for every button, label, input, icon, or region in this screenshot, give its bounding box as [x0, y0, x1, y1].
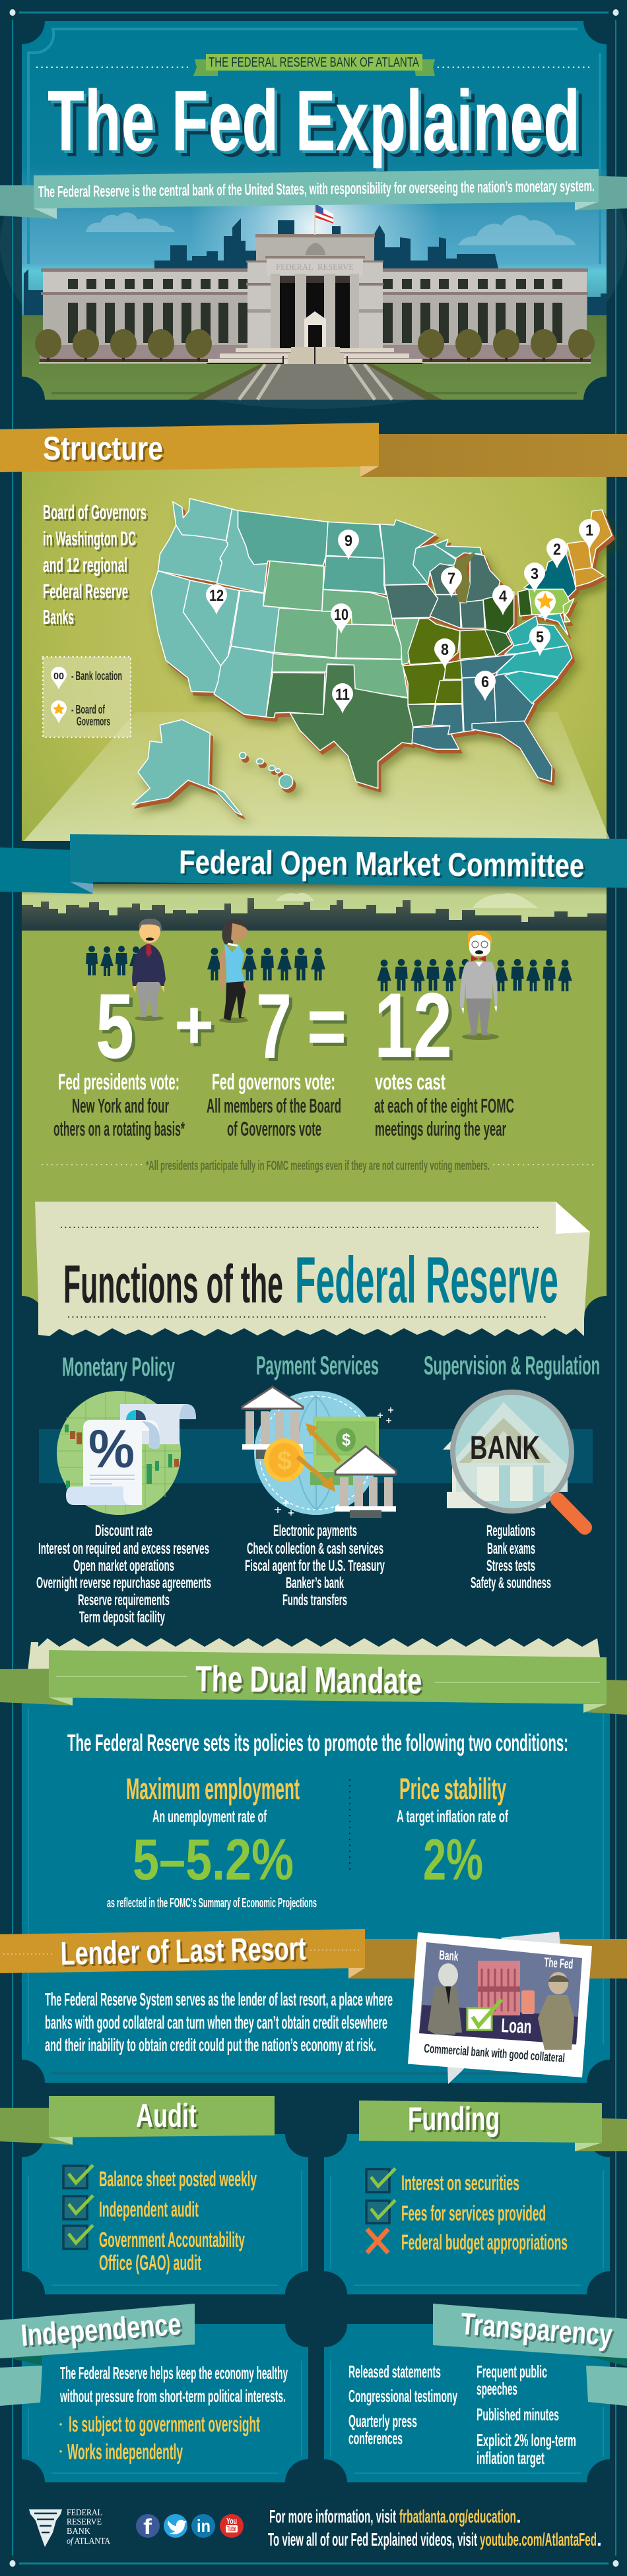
- heading: Functions of the: [63, 1254, 283, 1314]
- pin 5: [529, 626, 550, 656]
- list: Open market operations: [73, 1557, 174, 1575]
- pin 1: 1: [585, 522, 593, 539]
- crowd: governors: [207, 948, 325, 980]
- structure description: Banks: [43, 605, 74, 629]
- legend: - Board of: [71, 703, 106, 716]
- column: Maximum employment: as reflected in the FOMC’s Summary of Economic Projections: [107, 1896, 317, 1911]
- ribbon: Structure: [0, 423, 627, 477]
- column: Price stability: Price stability: [399, 1772, 506, 1806]
- loan door: [478, 1961, 520, 2015]
- column: Payment Services: [242, 1351, 396, 1609]
- district 10: [263, 561, 420, 698]
- transparency list: Published minutes: [477, 2405, 559, 2424]
- footer text: For more information, visit: [269, 2506, 396, 2527]
- ribbon: The Dual Mandate: [0, 1650, 627, 1715]
- ribbon: The Dual Mandate: The Dual Mandate: [195, 1658, 422, 1702]
- flag: [314, 203, 333, 235]
- panel: functions: [36, 1351, 600, 1626]
- text: Fed presidents vote: New York and four: [72, 1094, 169, 1117]
- district 2: [524, 553, 576, 598]
- legend: - Bank location: [71, 669, 122, 683]
- list: Electronic payments: [273, 1522, 357, 1540]
- column: Supervision & Regulation: [424, 1351, 600, 1592]
- clouds: [86, 212, 576, 245]
- column: Maximum employment: An unemployment rate of: [152, 1806, 267, 1826]
- checklist: [366, 2168, 568, 2254]
- icon: Facebook: [136, 2514, 160, 2538]
- text: Fed governors vote: All members of the Board: [207, 1094, 341, 1117]
- panel: Funding: [324, 2101, 627, 2294]
- list: Discount rate: [95, 1522, 152, 1540]
- character: economist: [460, 931, 499, 1040]
- independence text: [59, 2363, 288, 2464]
- transparency list: Frequent public: [477, 2362, 547, 2381]
- legend: Governors: [77, 715, 110, 728]
- teal panel: [22, 1695, 610, 2083]
- footer text: frbatlanta.org/education: [399, 2506, 516, 2527]
- checklist: [63, 2165, 257, 2275]
- pin 9: [338, 530, 359, 560]
- text: votes cast: at each of the eight FOMC: [374, 1094, 514, 1117]
- transparency list: speeches: [477, 2379, 517, 2399]
- ribbon: Funding: [359, 2101, 627, 2151]
- list: [471, 1522, 551, 1592]
- footer text: [268, 2506, 602, 2550]
- sky clouds: [276, 893, 539, 908]
- pin 8: [434, 638, 455, 669]
- list: Regulations: [486, 1522, 535, 1540]
- map pins: [206, 519, 600, 714]
- district 1: [567, 510, 612, 586]
- icon: YouTube: Tube: [227, 2525, 236, 2533]
- transparency list: [348, 2362, 576, 2468]
- equation: 5 + 7 = 12: 12: [374, 973, 452, 1077]
- structure description: Federal Reserve: [43, 580, 128, 603]
- crowd: all voters: [377, 959, 572, 991]
- pin 1: [579, 519, 600, 549]
- bank character: [428, 1963, 462, 2035]
- pin 2: 2: [553, 541, 561, 559]
- ribbon: Federal Reserve Bank of Atlanta: THE FEDERAL RESERVE BANK OF ATLANTA: [209, 55, 419, 70]
- district 11: [266, 665, 435, 788]
- structure description: in Washington DC: [43, 527, 136, 550]
- legend: 00: [53, 671, 64, 682]
- ribbon: Funding: Funding: [408, 2101, 500, 2137]
- icon: YouTube: You: [226, 2516, 237, 2526]
- text: Fed presidents vote: others on a rotating basis*: [53, 1117, 185, 1140]
- panel: structure: [22, 462, 612, 841]
- panel: Transparency: [324, 2304, 627, 2482]
- equation: 5 + 7 = 12: =: [307, 981, 346, 1072]
- ribbon: Structure: Structure: [43, 430, 163, 467]
- icon: payments: [242, 1387, 396, 1518]
- fed character: [521, 1972, 574, 2050]
- photo: commercial bank with good collateral: The Fed: [544, 1955, 574, 1972]
- text: votes cast: votes cast: [375, 1070, 446, 1095]
- district 6: [412, 654, 552, 782]
- independence text: Works independently: [67, 2439, 183, 2464]
- district 7: [385, 551, 500, 629]
- district 3: [529, 588, 574, 622]
- character: governor: [219, 919, 249, 1023]
- independence text: The Federal Reserve helps keep the economy healthy: [60, 2363, 288, 2383]
- equation: 5 + 7 = 12: +: [174, 987, 214, 1064]
- equation: 5 + 7 = 12: [96, 973, 452, 1078]
- map: Federal Reserve districts: [132, 499, 612, 815]
- photo: commercial bank with good collateral: Loan: [501, 2015, 532, 2038]
- list: [245, 1522, 385, 1609]
- ribbon: Lender of Last Resort: [0, 1929, 627, 1978]
- paper: Functions of the Federal Reserve: [35, 1202, 590, 1336]
- text: Fed presidents vote: [53, 1070, 185, 1140]
- column: Price stability: 2%: [423, 1827, 483, 1892]
- building inscription: FEDERAL RESERVE: [276, 262, 354, 272]
- panel: Independence: [0, 2304, 308, 2482]
- footer: [29, 2506, 602, 2550]
- column: Maximum employment: [107, 1772, 317, 1911]
- panel: hero: [22, 21, 607, 400]
- ribbon: Independence: Independence: [20, 2306, 182, 2352]
- icon: magnifier over bank: [443, 1392, 585, 1527]
- logo: FEDERAL: [67, 2508, 102, 2518]
- pin 8: 8: [441, 641, 449, 659]
- logo: of ATLANTA: [67, 2536, 111, 2546]
- ribbon: Federal Open Market Committee: [0, 834, 627, 894]
- column: Monetary Policy: Monetary Policy: [62, 1353, 175, 1382]
- column: Payment Services: Payment Services: [256, 1351, 379, 1380]
- district 9: [238, 510, 482, 595]
- icon: magnifier over bank: BANK: [470, 1429, 540, 1466]
- pin 9: 9: [345, 532, 352, 550]
- icon: Twitter: [164, 2514, 187, 2538]
- photo: commercial bank with good collateral: Bank: [439, 1948, 459, 1964]
- pin 4: 4: [499, 588, 508, 605]
- icon: payments: $: [277, 1446, 292, 1475]
- text: Fed presidents vote: Fed presidents vote:: [58, 1070, 180, 1095]
- structure description: and 12 regional: [43, 553, 127, 576]
- transparency list: Congressional testimony: [348, 2386, 457, 2406]
- pin: Board of Governors: [535, 591, 556, 621]
- independence text: Is subject to government oversight: [69, 2412, 260, 2436]
- icon: LinkedIn: in: [197, 2516, 211, 2536]
- photo: commercial bank with good collateral: [408, 1932, 592, 2084]
- icon: Facebook: f: [143, 2515, 152, 2538]
- transparency list: Quarterly press: [348, 2411, 417, 2431]
- list: Reserve requirements: [78, 1591, 170, 1609]
- column: Monetary Policy: [36, 1353, 211, 1626]
- district 4: [483, 589, 532, 656]
- crowd: presidents: [86, 946, 143, 976]
- ribbon: Lender of Last Resort: Lender of Last Resort: [60, 1931, 306, 1972]
- road: [188, 364, 442, 400]
- trees: [35, 329, 595, 364]
- pin 5: 5: [536, 629, 544, 646]
- checklist: Independent audit: [99, 2197, 199, 2221]
- text: Fed governors vote: Fed governors vote:: [212, 1070, 335, 1095]
- transparency list: inflation target: [477, 2448, 544, 2468]
- equation: 5 + 7 = 12: 7: [256, 974, 292, 1078]
- list: Funds transfers: [282, 1591, 347, 1609]
- panel: FOMC: [22, 884, 607, 1319]
- pin 6: 6: [481, 673, 489, 691]
- pin 12: [206, 584, 227, 615]
- check box: [467, 2000, 502, 2030]
- lawn: [22, 315, 607, 400]
- text: votes cast: meetings during the year: [375, 1117, 506, 1140]
- logo: RESERVE: [67, 2517, 102, 2527]
- character: president: [132, 919, 166, 1021]
- pin 3: 3: [531, 565, 539, 583]
- ribbon: Federal Reserve Bank of Atlanta: [37, 54, 593, 76]
- checklist: Office (GAO) audit: [99, 2251, 201, 2275]
- logo: BANK: [67, 2527, 90, 2536]
- panel: Audit: [0, 2096, 308, 2294]
- text: Fed governors vote: of Governors vote: [227, 1117, 321, 1140]
- pin 7: [441, 567, 462, 598]
- ribbon: Transparency: [433, 2304, 627, 2406]
- list: Safety & soundness: [471, 1574, 551, 1592]
- building: Federal Reserve: [40, 234, 591, 364]
- column: Maximum employment: 5–5.2%: [133, 1827, 294, 1892]
- logo: [29, 2508, 111, 2547]
- ribbon: Independence: [0, 2304, 195, 2406]
- text: votes cast: [374, 1070, 514, 1140]
- divider: [349, 1780, 350, 1870]
- pin 11: 11: [335, 686, 350, 704]
- legend: [43, 657, 131, 737]
- structure description: [43, 501, 147, 629]
- list: Interest on required and excess reserves: [38, 1540, 209, 1558]
- icon: YouTube: [220, 2514, 244, 2538]
- text: Fed governors vote: [207, 1070, 341, 1140]
- list: Stress tests: [486, 1557, 535, 1575]
- district 8: [403, 619, 496, 704]
- ribbon: Audit: Audit: [136, 2097, 197, 2134]
- list: [36, 1522, 211, 1626]
- icon: percent document: [57, 1391, 196, 1515]
- icon: payments: $: [342, 1430, 350, 1450]
- pin 6: [475, 671, 496, 701]
- torn paper: [28, 1638, 602, 1671]
- pin 3: [524, 563, 545, 593]
- hero sky panel: [22, 21, 607, 400]
- list: Check collection & cash services: [247, 1540, 383, 1558]
- checklist: Government Accountability: [99, 2228, 245, 2252]
- list: Bank exams: [487, 1540, 535, 1558]
- independence text: without pressure from short-term political interests.: [59, 2386, 286, 2406]
- transparency list: Released statements: [348, 2362, 441, 2381]
- icon: percent document: %: [88, 1419, 135, 1479]
- district 12: [132, 499, 293, 815]
- transparency list: conferences: [348, 2428, 403, 2448]
- footer text: .: [516, 2506, 521, 2527]
- district 5: [496, 613, 572, 704]
- column: Price stability: A target inflation rate of: [397, 1806, 508, 1826]
- structure description: Board of Governors: [43, 501, 147, 524]
- footer text: .: [597, 2529, 602, 2550]
- list: Fiscal agent for the U.S. Treasury: [245, 1557, 385, 1575]
- pin 7: 7: [447, 570, 455, 588]
- ribbon: intro statement: [0, 169, 627, 219]
- list: Banker’s bank: [286, 1574, 344, 1592]
- city skyline: [22, 898, 607, 931]
- panel: Dual Mandate and Lender: [0, 1638, 627, 2084]
- list: Term deposit facility: [79, 1609, 165, 1626]
- pin 12: 12: [209, 587, 224, 605]
- list: Overnight reverse repurchase agreements: [36, 1574, 211, 1592]
- band: [39, 1429, 593, 1483]
- column: Maximum employment: Maximum employment: [126, 1772, 300, 1806]
- skyline: [24, 218, 607, 317]
- pin 2: [546, 538, 568, 568]
- equation: 5 + 7 = 12: 5: [96, 974, 134, 1078]
- checklist: Interest on securities: [401, 2171, 519, 2195]
- checklist: Balance sheet posted weekly: [99, 2167, 257, 2191]
- pin 11: [332, 683, 353, 714]
- column: Price stability: [397, 1772, 508, 1892]
- pin 4: [492, 585, 513, 615]
- pin 10: 10: [334, 606, 348, 624]
- lender text: [45, 1989, 393, 2055]
- pin 10: [331, 603, 352, 634]
- icon: LinkedIn: [191, 2514, 215, 2538]
- ribbon: Audit: [0, 2096, 275, 2145]
- heading: [63, 1243, 558, 1316]
